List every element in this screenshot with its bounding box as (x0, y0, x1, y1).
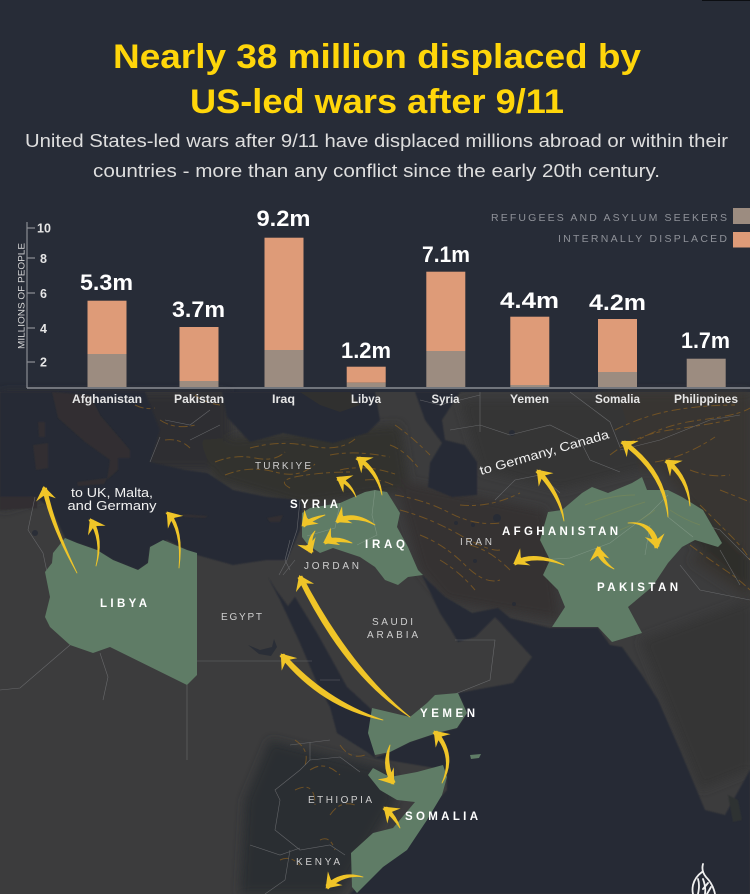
title (113, 38, 641, 121)
y axis (16, 222, 51, 388)
bar: Syria: 7.1m (422, 242, 470, 267)
internal borders in green countries (307, 490, 693, 560)
y axis: 8 (40, 252, 47, 266)
arrow: Pakistan to north 2 (665, 460, 690, 506)
bar: Pakistan: 3.7m (172, 297, 225, 322)
bar: Pakistan (172, 297, 225, 406)
arrow: Somalia to Yemen (433, 731, 449, 783)
bar: Iraq: Iraq (272, 394, 295, 406)
label: Saudi Arabia: SAUDI (372, 617, 413, 628)
island: Sri Lanka (728, 795, 742, 822)
sea: Mediterranean (0, 392, 302, 570)
bar: Libya: 1.2m (341, 338, 391, 363)
arrow: Afghanistan to north (536, 470, 564, 521)
bar: Somalia: 4.2m (589, 290, 646, 315)
arrow: Afghanistan to Iran (515, 556, 564, 565)
arrow: Syria west (303, 515, 325, 527)
subtitle: countries - more than any conflict since the early 20th century. (93, 160, 660, 181)
title: Nearly 38 million displaced by (113, 38, 641, 76)
legend (491, 208, 750, 248)
sea: Arabian Sea and Gulf (350, 575, 750, 894)
label: Pakistan: PAKISTAN (597, 582, 678, 594)
arrows (42, 441, 690, 889)
arrow: Yemen to Somalia (385, 745, 395, 784)
y axis: 6 (40, 287, 47, 301)
label: Afghanistan: AFGHANISTAN (502, 526, 618, 538)
bar: Yemen (500, 288, 559, 406)
note: to UK, Malta, and Germany: to UK, Malta, (71, 486, 153, 500)
note: to UK, Malta, and Germany (68, 486, 157, 513)
bar: Yemen: 4.4m (500, 288, 559, 313)
arrow: Iraq to Jordan (325, 538, 352, 544)
bar: Iraq (256, 206, 310, 406)
label: Yemen: YEMEN (420, 708, 475, 720)
arrow: Yemen to Jordan (298, 576, 410, 717)
label: Iraq: IRAQ (365, 539, 405, 551)
bar: Libya: Libya (351, 394, 382, 406)
bar: Afghanistan (72, 270, 142, 406)
bar: Iraq: 9.2m (256, 206, 310, 231)
y axis: MILLIONS OF PEOPLE (16, 243, 28, 349)
y axis: 2 (40, 356, 47, 370)
bar: Yemen: Yemen (510, 394, 549, 406)
panel: Afghanistan and Pakistan (540, 477, 722, 642)
bar: Syria (422, 242, 470, 406)
arrow: Pakistan to Afghanistan (596, 547, 614, 569)
label: Ethiopia: ETHIOPIA (308, 795, 372, 806)
label: Egypt: EGYPT (221, 612, 262, 623)
bar: Afghanistan: Afghanistan (72, 394, 142, 406)
label: Iran: IRAN (460, 537, 492, 548)
island: Socotra (470, 754, 481, 759)
panel: Yemen (368, 693, 467, 755)
arrow: Afghanistan to Pakistan (628, 523, 659, 548)
bar: Philippines: 1.7m (681, 328, 730, 353)
note: to UK, Malta, and Germany: and Germany (68, 499, 157, 513)
bar: Philippines: Philippines (674, 394, 738, 406)
bar: Philippines (674, 328, 738, 406)
map labels (68, 427, 678, 868)
bar: Syria: Syria (432, 394, 460, 406)
label: Saudi Arabia: ARABIA (367, 630, 418, 641)
bar: Somalia (589, 290, 646, 406)
note: to Germany, Canada: to Germany, Canada (478, 427, 611, 478)
arrow: Somalia to Kenya (326, 875, 363, 889)
arrow: Iraq to Turkiye 1 (356, 457, 382, 495)
bar: Libya (341, 338, 391, 406)
salt lakes (32, 430, 516, 656)
border lines (0, 392, 750, 894)
arrow: Libya west (42, 488, 77, 573)
bar: Afghanistan: 5.3m (80, 270, 133, 295)
y axis: 4 (40, 322, 47, 336)
sea: Black Sea (222, 392, 380, 443)
bar: Somalia: Somalia (595, 394, 641, 406)
label: Turkiye: TURKIYE (255, 461, 311, 472)
arrow: Syria south (308, 531, 315, 552)
arrow: Pakistan to north 1 (621, 441, 668, 517)
land: Crimea (300, 392, 360, 412)
panel: Syria and Iraq (302, 490, 423, 585)
bar: Pakistan: Pakistan (174, 394, 224, 406)
arrow: Libya centre (89, 520, 99, 566)
arrow: Libya east (166, 513, 180, 568)
panel: Libya (45, 538, 197, 685)
label: Kenya: KENYA (296, 857, 340, 868)
icon: Al Jazeera logo (692, 864, 715, 894)
legend: INTERNALLY DISPLACED (558, 233, 727, 245)
subtitle: United States-led wars after 9/11 have displaced millions abroad or within their (25, 130, 728, 151)
sea: Red Sea (268, 577, 375, 758)
map background (0, 392, 750, 894)
arrow: Somalia to Ethiopia (383, 807, 400, 828)
label: Somalia: SOMALIA (405, 811, 478, 823)
label: Libya: LIBYA (100, 598, 147, 610)
label: Jordan: JORDAN (304, 561, 359, 572)
bar chart (16, 206, 750, 406)
title: US-led wars after 9/11 (190, 83, 564, 121)
subtitle (25, 130, 728, 181)
legend: REFUGEES AND ASYLUM SEEKERS (491, 212, 727, 224)
sea: Caspian Sea (415, 392, 477, 497)
arrow: Yemen to Egypt (280, 654, 383, 720)
land: Italy and islands (0, 392, 283, 522)
arrow: Syria to Turkiye 2 (337, 477, 356, 497)
terrain streaks (135, 395, 750, 865)
terrain in Afghanistan (585, 495, 700, 530)
panel: Somalia (351, 765, 447, 893)
y axis: 10 (37, 222, 51, 236)
label: Syria: SYRIA (290, 499, 338, 511)
label: Saudi Arabia (367, 617, 418, 641)
arrow: Iraq to Syria (337, 516, 375, 525)
